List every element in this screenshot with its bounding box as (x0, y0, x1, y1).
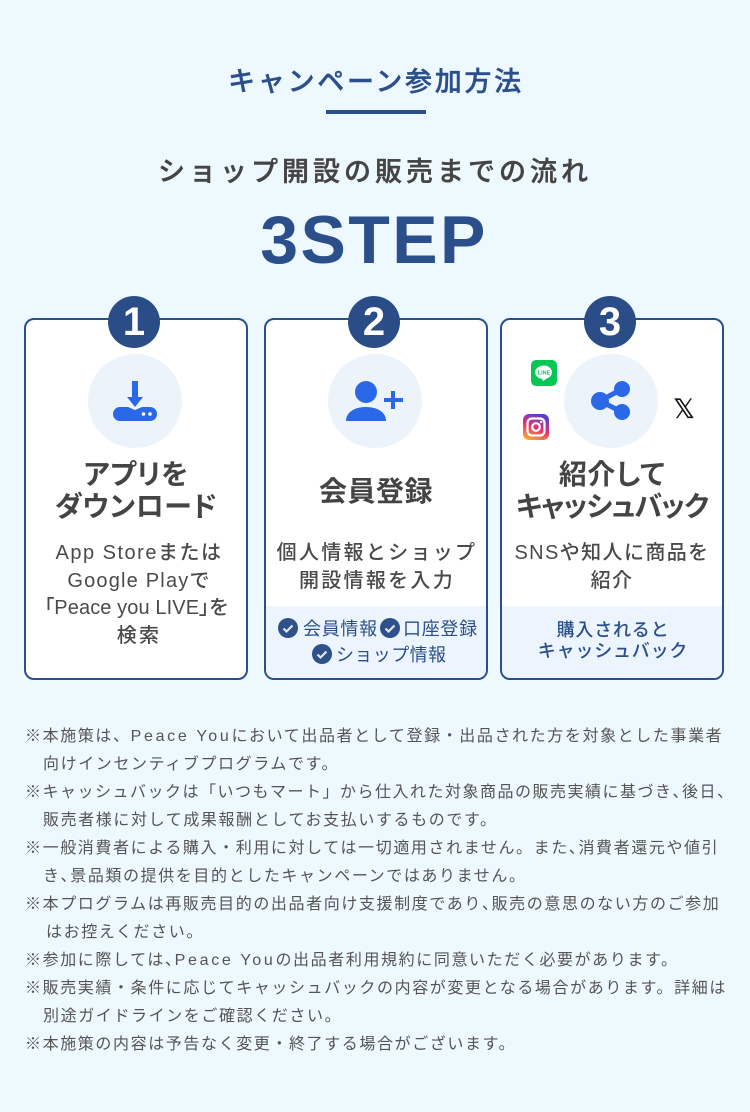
step 1 description: Google Playで (67, 570, 211, 592)
step 3 description: SNSや知人に商品を (514, 542, 710, 564)
notes text block: き、景品類の提供を目的としたキャンペーンではありません。 (43, 868, 527, 885)
step 1 heading: ダウンロード (55, 491, 217, 522)
title: campaign participation: キャンペーン参加方法 (228, 67, 524, 97)
icon: LINE: LINE (538, 370, 551, 376)
step 3 band text: 購入されると (557, 620, 669, 640)
item: shop info: ショップ情報 (336, 645, 446, 665)
step 3 heading: 紹介して (559, 459, 665, 490)
check icon (380, 618, 400, 638)
notes text block (25, 727, 735, 1053)
notes text block: ※本プログラムは再販売目的の出品者向け支援制度であり、販売の意思のない方のご参加 (25, 896, 720, 913)
notes text block: 向けインセンティブプログラムです。 (43, 756, 339, 773)
notes text block: ※本施策の内容は予告なく変更・終了する場合がございます。 (25, 1036, 516, 1053)
icon: share (564, 354, 658, 448)
panel: step 3 card (500, 318, 724, 680)
icon: download (88, 354, 182, 448)
notes text block: はお控えください。 (46, 924, 204, 941)
notes text block: ※キャッシュバックは「いつもマート」から仕入れた対象商品の販売実績に基づき、後日、 (25, 784, 735, 801)
step 1 description (44, 542, 228, 647)
item: member info: 会員情報 (303, 619, 378, 639)
item: account registration: 口座登録 (403, 619, 478, 639)
step 2 description: 個人情報とショップ (277, 542, 477, 564)
check icon (312, 644, 332, 664)
title underline (326, 110, 426, 114)
step 2 description (276, 542, 477, 592)
step 2 number badge: 2 (363, 300, 385, 344)
step 1 description: 検索 (117, 625, 161, 647)
step 1 heading: アプリを (84, 459, 188, 490)
notes text block: 販売者様に対して成果報酬としてお支払いするものです。 (43, 812, 498, 829)
icon: Instagram (523, 414, 549, 440)
step 3 heading: キャッシュバック (516, 491, 708, 522)
subtitle: ショップ開設の販売までの流れ (158, 157, 592, 187)
notes text block: ※参加に際しては、Peace Youの出品者利用規約に同意いただく必要があります。 (25, 952, 679, 969)
step 3 band text (538, 620, 688, 661)
step 1 number badge: 1 (123, 300, 145, 344)
icon: add user (328, 354, 422, 448)
step 3 description: 紹介 (591, 570, 633, 592)
panel: step 2 card (264, 318, 488, 680)
check icon (278, 618, 298, 638)
step 2 heading: 会員登録 (319, 476, 433, 507)
panel: step 1 card (24, 318, 248, 680)
heading: 3STEP: 3STEP (260, 202, 488, 278)
step 1 description: 「Peace you LIVE」を (44, 597, 228, 619)
notes text block: ※本施策は、Peace Youにおいて出品者として登録・出品された方を対象とした事業者 (25, 728, 723, 745)
step 1 heading (55, 459, 217, 522)
notes text block: ※販売実績・条件に応じてキャッシュバックの内容が変更となる場合があります。詳細は (25, 980, 727, 997)
icon: X: 𝕏 (673, 394, 695, 425)
step 2 checklist (278, 618, 478, 665)
step 1 number badge (108, 296, 160, 348)
step 2 description: 開設情報を入力 (299, 570, 455, 592)
icon: LINE (531, 360, 557, 386)
step 3 heading (516, 459, 708, 522)
step 2 number badge (348, 296, 400, 348)
step 3 number badge (584, 296, 636, 348)
step 3 number badge: 3 (599, 300, 621, 344)
notes text block: 別途ガイドラインをご確認ください。 (43, 1008, 342, 1025)
step 3 description (514, 542, 710, 592)
step 1 description: App Storeまたは (56, 542, 222, 564)
notes text block: ※一般消費者による購入・利用に対しては一切適用されません。また、消費者還元や値引 (25, 840, 719, 857)
step 3 band text: キャッシュバック (538, 641, 688, 661)
